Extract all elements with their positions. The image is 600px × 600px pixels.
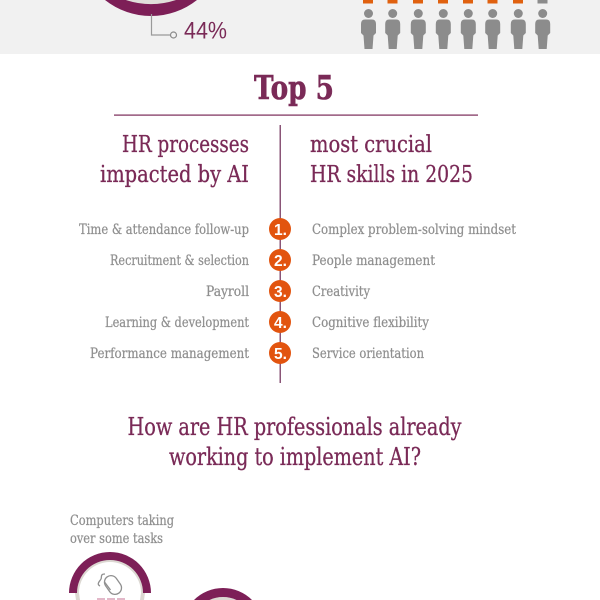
rank badges 1 to 5: 3.: [274, 284, 287, 301]
list: most crucial HR skills: Complex problem-solving mindset: [312, 222, 516, 238]
donut chart: cropped ring: [105, 0, 197, 16]
title: Top 5: Top 5: [254, 68, 334, 107]
list: HR processes impacted by AI: Payroll: [206, 284, 249, 300]
rank badges 1 to 5: [269, 218, 291, 364]
heading: most crucial HR skills in 2025: most crucial: [310, 132, 432, 158]
rank badges 1 to 5: 1.: [274, 222, 287, 239]
heading: HR processes impacted by AI: [100, 132, 249, 188]
list: HR processes impacted by AI: [79, 222, 249, 362]
list: most crucial HR skills: Service orientation: [312, 346, 424, 362]
rank badges 1 to 5: 2.: [274, 253, 287, 270]
heading: most crucial HR skills in 2025: HR skills in 2025: [310, 162, 473, 188]
label: computers taking over some tasks: [70, 513, 174, 547]
heading: HR processes impacted by AI: HR processes: [122, 132, 249, 158]
rank badges 1 to 5: 4.: [274, 315, 287, 332]
rank badges 1 to 5: 5.: [274, 346, 287, 363]
gauge value, cropped at edge: [97, 598, 125, 600]
icon: computer mouse: [98, 573, 124, 597]
list: HR processes impacted by AI: Performance management: [90, 346, 249, 362]
heading: most crucial HR skills in 2025: [310, 132, 473, 188]
list: HR processes impacted by AI: Recruitment & selection: [110, 253, 249, 269]
list: most crucial HR skills: [312, 222, 516, 362]
heading: How are HR professionals already working to implement AI?: How are HR professionals already: [128, 413, 462, 441]
panel: top statistics band: [0, 0, 600, 54]
central vertical timeline: [280, 125, 281, 383]
list: most crucial HR skills: Creativity: [312, 284, 370, 300]
list: HR processes impacted by AI: Time & attendance follow-up: [79, 222, 249, 238]
heading: How are HR professionals already working to implement AI?: [128, 413, 462, 471]
callout: 44 percent leader line: [152, 14, 227, 44]
divider under title: [114, 114, 478, 116]
heading: HR processes impacted by AI: impacted by AI: [100, 162, 249, 188]
label: computers taking over some tasks: over some tasks: [70, 531, 163, 547]
gauge: second cropped ring: [194, 588, 252, 600]
list: most crucial HR skills: Cognitive flexibility: [312, 315, 429, 331]
callout: 44 percent leader line: 44%: [184, 18, 227, 44]
list: most crucial HR skills: People management: [312, 253, 435, 269]
pictogram: row of people: [361, 0, 550, 49]
gauge: computers taking over tasks: [69, 552, 151, 600]
heading: How are HR professionals already working to implement AI?: working to implement AI?: [169, 443, 421, 471]
list: HR processes impacted by AI: Learning & development: [105, 315, 249, 331]
label: computers taking over some tasks: Computers taking: [70, 513, 174, 529]
